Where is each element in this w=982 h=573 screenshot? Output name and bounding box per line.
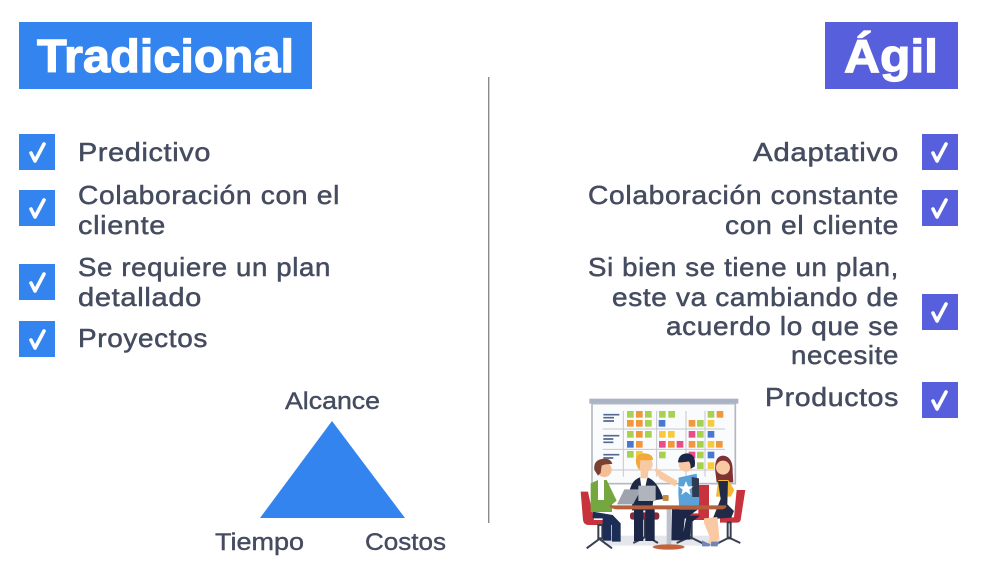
item: Se requiere un plan detallado (19, 252, 331, 312)
person: left, green jacket (591, 459, 621, 542)
item: Proyectos (19, 321, 208, 357)
person: right, yellow blouse (702, 456, 734, 546)
item: Colaboración constante con el cliente: con el cliente (725, 210, 899, 240)
item: Si bien se tiene un plan (588, 252, 958, 370)
heading: Tradicional (19, 22, 312, 89)
chairs (581, 485, 745, 525)
item: Colaboración con el cliente (19, 180, 340, 240)
heading: Tradicional: Tradicional (37, 30, 294, 82)
item: Adaptativo: Adaptativo (753, 137, 899, 167)
center divider (488, 77, 489, 523)
label: Alcance: Alcance (285, 388, 380, 415)
label: Tiempo: Tiempo (215, 529, 304, 556)
person: star t-shirt (655, 453, 700, 540)
item: Se requiere un plan detallado: detallado (78, 282, 202, 312)
triangle (260, 421, 405, 518)
item: Se requiere un plan detallado: Se requiere un plan (78, 252, 331, 282)
item: Colaboración con el cliente: cliente (78, 210, 166, 240)
illustration: team meeting at kanban board (581, 399, 745, 550)
item: Colaboración con el cliente: Colaboración con el (78, 180, 340, 210)
label: Costos: Costos (365, 529, 446, 556)
triangle diagram (215, 388, 446, 556)
item: Colaboración constante con el cliente (588, 180, 958, 240)
heading: Ágil: Ágil (844, 30, 938, 82)
kanban board (589, 399, 738, 484)
item: Si bien se tiene un plan: Si bien se tiene un plan, (588, 252, 899, 282)
item: Predictivo (19, 134, 211, 170)
laptops (617, 486, 656, 504)
item: Si bien se tiene un plan: necesite (791, 340, 899, 370)
heading: Ágil (825, 22, 958, 89)
item: Si bien se tiene un plan: acuerdo lo que se (666, 311, 899, 341)
item: Adaptativo (753, 134, 958, 170)
item: Proyectos: Proyectos (78, 323, 208, 353)
item: Productos (765, 382, 958, 418)
person: blond, dark jacket (629, 453, 663, 541)
floor shadow (603, 536, 720, 546)
item: Predictivo: Predictivo (78, 137, 211, 167)
item: Si bien se tiene un plan: este va cambiando de (612, 282, 899, 312)
panel: tradicional (19, 22, 446, 556)
item: Colaboración constante con el cliente: Colaboración constante (588, 180, 899, 210)
table (609, 495, 726, 550)
panel: agil (581, 22, 958, 550)
item: Productos: Productos (765, 382, 899, 412)
